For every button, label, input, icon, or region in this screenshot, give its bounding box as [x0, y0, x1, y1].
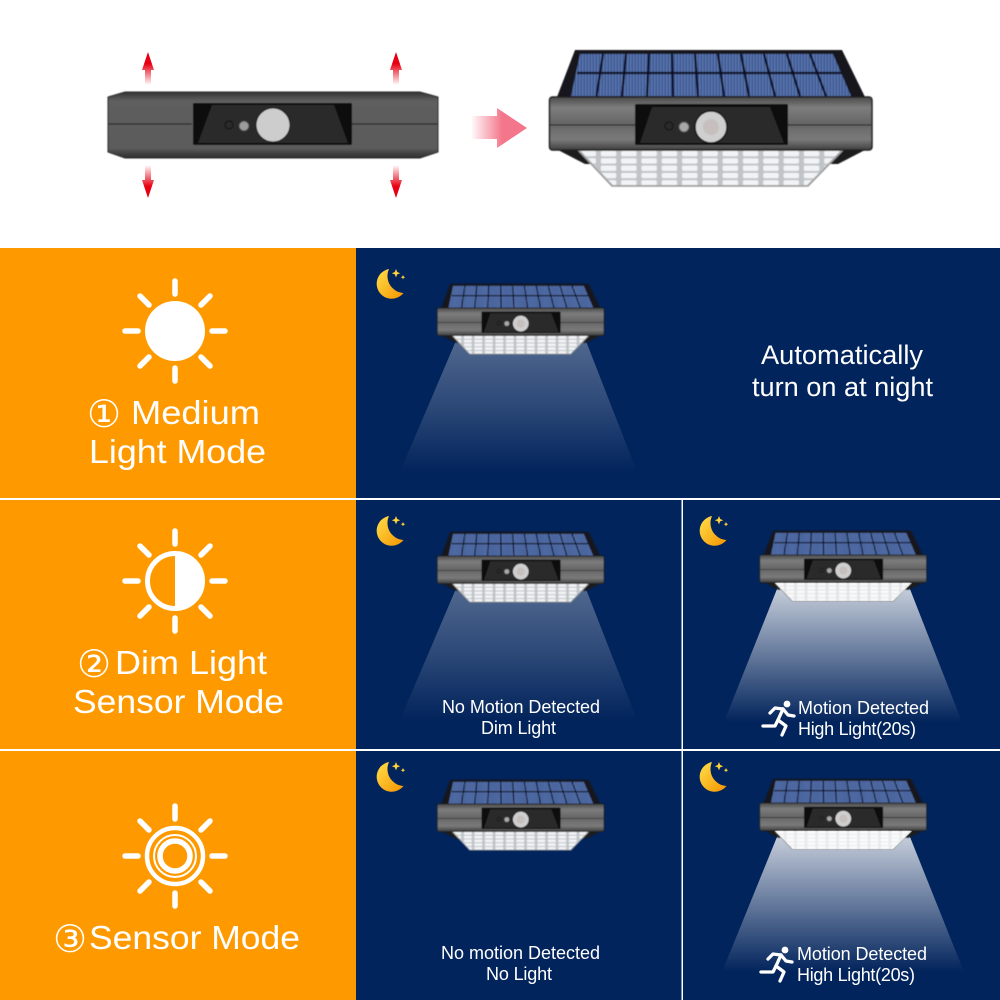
- text: no motion detected dim light: Dim Light: [481, 718, 556, 738]
- arrow: bottom left: [142, 165, 154, 198]
- arrow: top right: [390, 52, 402, 85]
- panel: closed light with four pull-out arrows: [108, 52, 438, 198]
- arrow: top left: [142, 52, 154, 85]
- icon: running person: [761, 947, 792, 981]
- heading: dim light sensor mode: Dim Light: [115, 644, 267, 681]
- lamp: [437, 532, 604, 602]
- arrow: closed to open: [472, 108, 527, 148]
- glow on led panel: [775, 831, 912, 849]
- heading: dim light sensor mode: Sensor Mode: [73, 683, 284, 720]
- heading: sensor mode: ③: [53, 917, 87, 961]
- panel: medium mode night scene: [377, 269, 933, 472]
- lamp: [437, 284, 604, 354]
- text: motion detected high light: [797, 944, 927, 985]
- text: motion detected high light: High Light(20s): [798, 719, 916, 739]
- heading: sensor mode: Sensor Mode: [89, 919, 300, 956]
- text: motion detected high light: Motion Detected: [797, 944, 927, 964]
- icon: half sun: [125, 531, 225, 631]
- lamp: [760, 779, 927, 849]
- heading: medium light mode: [87, 392, 266, 470]
- icon: running person: [763, 701, 794, 735]
- heading: dim light sensor mode: [73, 642, 284, 720]
- icon: ringed sun: [125, 806, 225, 906]
- panel: sensor mode label: [53, 806, 300, 961]
- text: no motion detected no light: No Light: [486, 964, 552, 984]
- heading: dim light sensor mode: ②: [77, 642, 111, 686]
- panel: no motion no light scene: [377, 762, 604, 984]
- text: automatically turn on at night: Automatically: [761, 340, 923, 370]
- text: no motion detected no light: [441, 943, 600, 984]
- panel: motion high light scene: [700, 516, 962, 739]
- lamp: [760, 531, 927, 601]
- heading: sensor mode: [53, 917, 300, 961]
- text: motion detected high light: [798, 698, 929, 739]
- icon: full sun: [125, 281, 225, 381]
- light beam: [400, 336, 637, 472]
- open solar light: [550, 50, 872, 186]
- panel: dim light sensor mode label: [73, 531, 284, 720]
- heading: medium light mode: ①: [87, 392, 121, 436]
- text: no motion detected dim light: No Motion Detected: [442, 697, 600, 717]
- arrow: bottom right: [390, 165, 402, 198]
- panel: motion high light scene two: [700, 762, 964, 985]
- text: automatically turn on at night: [752, 340, 933, 402]
- light beam: [724, 584, 962, 722]
- heading: medium light mode: Light Mode: [89, 433, 266, 470]
- text: motion detected high light: High Light(20s): [797, 965, 915, 985]
- icon: moon: [377, 269, 405, 299]
- panel: orange column: [0, 248, 356, 1000]
- glow on led panel: [775, 583, 912, 601]
- closed lamp body: [108, 92, 438, 158]
- panel: medium light mode label: [87, 281, 266, 470]
- light beam: [722, 832, 964, 972]
- text: automatically turn on at night: turn on at night: [752, 372, 933, 402]
- icon: moon: [377, 516, 405, 546]
- icon: moon: [377, 762, 405, 792]
- icon: moon: [700, 762, 728, 792]
- light beam: [400, 584, 637, 720]
- heading: medium light mode: Medium: [131, 394, 260, 431]
- text: no motion detected no light: No motion Detected: [441, 943, 600, 963]
- lamp: [437, 780, 604, 850]
- text: no motion detected dim light: [442, 697, 600, 738]
- panel: navy area: [356, 248, 1000, 1000]
- panel: no motion dim light scene: [377, 516, 637, 738]
- text: motion detected high light: Motion Detected: [798, 698, 929, 718]
- icon: moon: [700, 516, 728, 546]
